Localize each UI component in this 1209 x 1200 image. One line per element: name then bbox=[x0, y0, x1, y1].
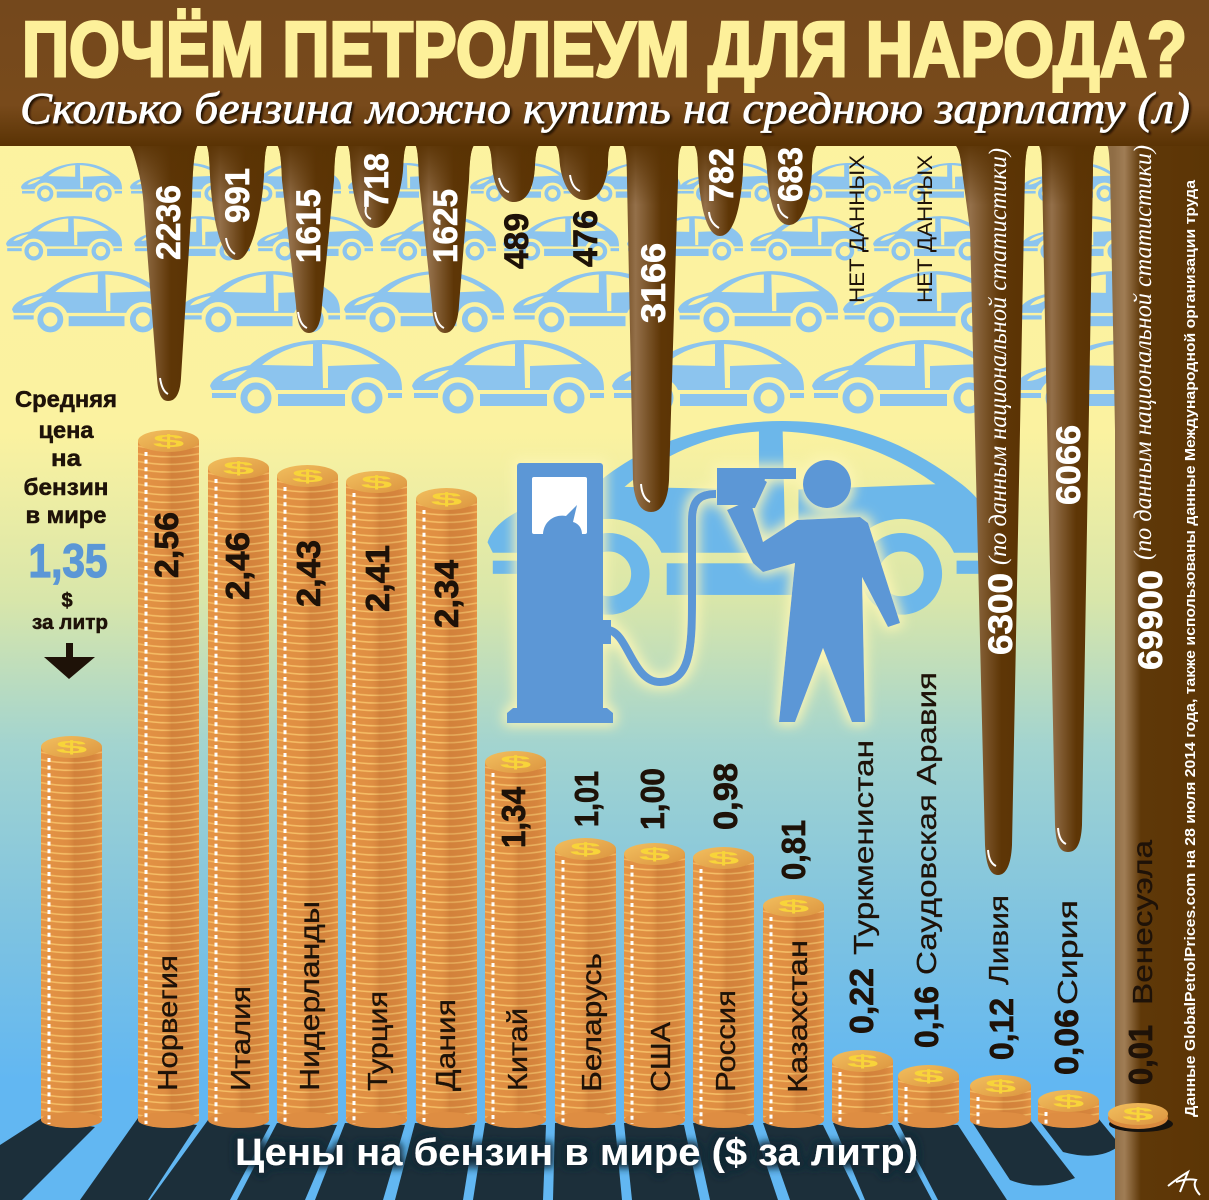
header band bbox=[0, 0, 1209, 146]
price labels: 0,06 bbox=[1048, 1009, 1085, 1075]
side text: world average price: 1,35 bbox=[28, 534, 108, 587]
country labels: Италия bbox=[225, 986, 256, 1091]
note: Venezuela litres bbox=[1130, 145, 1170, 670]
coin stack: Turkmenistan bbox=[832, 1050, 893, 1128]
coin stack: world average bbox=[41, 736, 102, 1128]
side text: world average price: в мире bbox=[26, 502, 106, 528]
drip 1625 bbox=[411, 142, 480, 333]
drip 718 bbox=[343, 142, 411, 228]
coin: Venezuela single coin bbox=[1108, 1103, 1173, 1132]
coin stack: China: $ bbox=[500, 752, 531, 772]
coin stack: Italy bbox=[208, 457, 269, 1128]
coin stack: Libya: $ bbox=[985, 1076, 1016, 1096]
coin stack: Kazakhstan: $ bbox=[778, 896, 809, 916]
drip 683 bbox=[754, 142, 824, 225]
coin stack: Russia bbox=[693, 847, 754, 1128]
drip 2236: 2236 bbox=[150, 185, 188, 260]
coin stack: Turkey: $ bbox=[361, 472, 392, 492]
coin stack: Denmark bbox=[416, 488, 477, 1128]
price labels: 0,22 bbox=[843, 968, 880, 1034]
coin stack: Turkey bbox=[346, 471, 407, 1128]
coin stack: Kazakhstan bbox=[763, 895, 824, 1128]
drip 489 bbox=[480, 142, 547, 269]
no data label 1: НЕТ ДАННЫХ bbox=[846, 155, 869, 303]
price labels: 2,43 bbox=[290, 540, 327, 607]
price labels: 1,01 bbox=[568, 771, 605, 827]
coin stack: Belarus: $ bbox=[570, 839, 601, 859]
coin stack: Syria: $ bbox=[1053, 1091, 1084, 1111]
coin stack: world average: $ bbox=[56, 737, 87, 757]
drip 476: 476 bbox=[567, 210, 605, 267]
drip 3166: 3166 bbox=[635, 243, 673, 323]
price labels: 1,00 bbox=[634, 768, 671, 830]
coin stack: Syria bbox=[1038, 1090, 1099, 1128]
note: Venezuela litres: 69900 bbox=[1132, 570, 1170, 670]
drip 1615 bbox=[272, 142, 343, 333]
drip 6066 bbox=[1034, 142, 1102, 852]
country labels: Сирия bbox=[1052, 900, 1083, 1005]
drip 782: 782 bbox=[703, 148, 741, 202]
subtitle: Сколько бензина можно купить на среднюю зарплату (л) bbox=[20, 84, 1190, 133]
signature bbox=[1168, 1172, 1200, 1195]
country labels: Россия bbox=[710, 990, 741, 1092]
coin stack: China bbox=[485, 751, 546, 1128]
drip 476 bbox=[547, 142, 617, 267]
drip 683: 683 bbox=[772, 147, 810, 202]
no data label 2: НЕТ ДАННЫХ bbox=[914, 155, 937, 303]
row of medium cars bbox=[12, 271, 1180, 330]
side text: world average price: на bbox=[51, 445, 81, 471]
country labels: Беларусь bbox=[576, 953, 607, 1092]
side text: world average price: $ bbox=[61, 590, 73, 612]
country labels: Дания bbox=[430, 999, 461, 1091]
coin stack: USA: $ bbox=[639, 844, 670, 864]
drip 991: 991 bbox=[219, 168, 257, 223]
coin stack: Russia: $ bbox=[708, 848, 739, 868]
country labels: Нидерланды bbox=[294, 901, 325, 1091]
drip 489: 489 bbox=[498, 213, 536, 269]
coin stack: Netherlands: $ bbox=[292, 466, 323, 486]
coin stack: Turkmenistan: $ bbox=[847, 1051, 878, 1071]
price labels: 2,41 bbox=[359, 545, 396, 612]
country labels: Саудовская Аравия bbox=[911, 672, 942, 975]
side text: world average price: цена bbox=[38, 417, 94, 443]
country labels: Казахстан bbox=[782, 940, 813, 1093]
coin stack: Libya bbox=[970, 1075, 1031, 1128]
drip 6300 with note bbox=[948, 142, 1034, 875]
price labels bbox=[148, 512, 1159, 1085]
coin stack: Saudi Arabia: $ bbox=[913, 1066, 944, 1086]
arrow pointing down to average stack bbox=[44, 643, 95, 679]
icon: hose bbox=[608, 494, 716, 682]
drip 1615: 1615 bbox=[290, 189, 328, 263]
price labels: 0,12 bbox=[983, 998, 1020, 1060]
icon: nozzle bbox=[717, 468, 796, 508]
country labels bbox=[152, 672, 1158, 1093]
shadows of coin stacks bbox=[0, 1118, 1120, 1200]
coin stack: Denmark: $ bbox=[431, 489, 462, 509]
country labels: Норвегия bbox=[152, 955, 183, 1091]
coin stack: Norway: $ bbox=[153, 431, 184, 451]
price labels: 2,56 bbox=[148, 512, 185, 578]
side text: world average price bbox=[15, 386, 117, 634]
bottom caption: Цены на бензин в мире ($ за литр) bbox=[235, 1132, 918, 1174]
big car behind the pump bbox=[488, 421, 993, 605]
side text: world average price: бензин bbox=[24, 474, 108, 500]
drip 3166 bbox=[617, 142, 688, 512]
country labels: Венесуэла bbox=[1127, 840, 1158, 1005]
coin stack: Saudi Arabia bbox=[898, 1065, 959, 1128]
drip 991 bbox=[202, 142, 272, 260]
row of small cars, first row bbox=[21, 163, 1123, 200]
country labels: Китай bbox=[502, 1008, 533, 1091]
drip 6066: 6066 bbox=[1050, 425, 1088, 505]
price labels: 2,46 bbox=[219, 532, 256, 600]
coin stack: Norway bbox=[138, 430, 199, 1128]
drip 2236 bbox=[120, 142, 202, 401]
country labels: Туркменистан bbox=[848, 740, 879, 955]
right brown column (Venezuela) bbox=[1102, 142, 1209, 1200]
price labels: 1,34 bbox=[495, 786, 532, 848]
icon: fuel pump and man with nozzle bbox=[507, 460, 900, 723]
price labels: 0,01 bbox=[1122, 1025, 1159, 1085]
row of large cars bbox=[210, 340, 1207, 410]
coin stack: Italy: $ bbox=[223, 458, 254, 478]
drip 6300 with note: (по данным национальной статистики) bbox=[985, 148, 1012, 565]
country labels: США bbox=[645, 1022, 676, 1092]
drip 6300 with note: 6300 bbox=[982, 573, 1020, 655]
side text: world average price: Средняя bbox=[15, 386, 117, 412]
price labels: 0,16 bbox=[908, 986, 945, 1048]
price labels: 0,81 bbox=[775, 820, 812, 880]
drip 718: 718 bbox=[358, 153, 396, 208]
drip 1625: 1625 bbox=[427, 189, 465, 263]
country labels: Турция bbox=[362, 991, 393, 1091]
note: Venezuela litres: (по данным национальной статистики) bbox=[1130, 145, 1157, 560]
icon: fuel pump bbox=[507, 463, 613, 723]
side text: world average price: за литр bbox=[32, 612, 108, 634]
coin stack: Netherlands bbox=[277, 465, 338, 1128]
coin: Venezuela single coin: $ bbox=[1122, 1104, 1154, 1124]
source note: Данные GlobalPetrolPrices.com на 28 июля 2014 года, также использованы данные Международной организации труда bbox=[1182, 179, 1199, 1117]
price labels: 2,34 bbox=[428, 559, 465, 628]
country labels: Ливия bbox=[983, 895, 1014, 985]
drip 782 bbox=[688, 142, 754, 236]
row of small cars, second row bbox=[6, 216, 1138, 258]
coin stack: Belarus bbox=[555, 838, 616, 1128]
icon: man bbox=[727, 460, 900, 722]
price labels: 0,98 bbox=[707, 763, 744, 830]
coin stack: USA bbox=[624, 843, 685, 1128]
